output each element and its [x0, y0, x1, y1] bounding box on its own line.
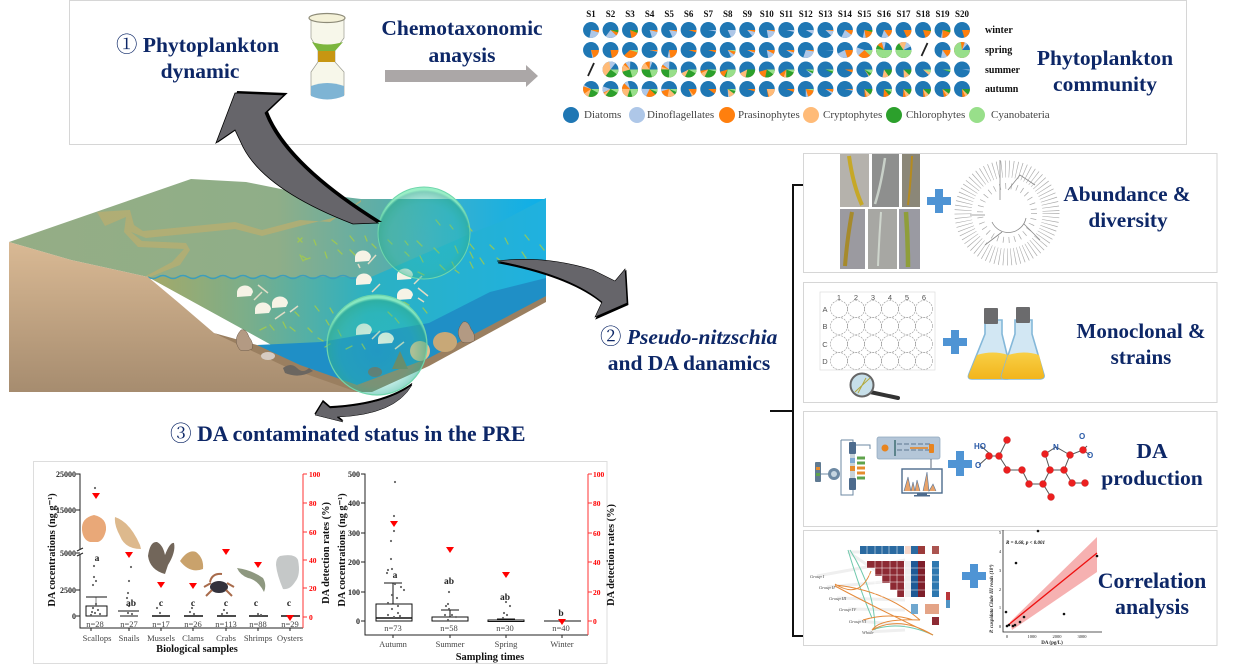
- icon: clam: [180, 551, 203, 570]
- category labels: Crabs: [216, 633, 236, 643]
- chart: pie grid: [583, 9, 1021, 97]
- left tick labels: 100: [348, 588, 360, 597]
- left tick labels: 500: [348, 470, 360, 479]
- category labels: n=26: [184, 619, 202, 629]
- scatter plot: 5: [999, 530, 1002, 535]
- zooplankton: [237, 250, 428, 349]
- letters: ab: [126, 599, 136, 609]
- left tick labels: 25000: [56, 470, 76, 479]
- chromatography diagram: [815, 437, 942, 496]
- molecule: domoic acid: N: [1053, 443, 1059, 452]
- station labels: S5: [664, 9, 674, 19]
- axis titles: Sampling times: [456, 652, 524, 663]
- left tick labels: 200: [348, 558, 360, 567]
- well plate: 4: [888, 293, 892, 302]
- molecule: domoic acid: O: [1079, 432, 1085, 441]
- icon: plus: [943, 330, 967, 354]
- category labels: Summer: [436, 639, 465, 649]
- well plate: 2: [854, 293, 858, 302]
- heading: chemotaxonomic analysis: Chemotaxonomic: [381, 16, 543, 40]
- letters: c: [254, 599, 258, 609]
- station labels: S7: [703, 9, 713, 19]
- chart: sampling times: [337, 470, 617, 663]
- icon: oyster: [276, 555, 299, 589]
- category labels: n=73: [384, 623, 402, 633]
- season labels: winter: [985, 25, 1013, 36]
- panel: DA contamination charts: [34, 462, 617, 664]
- panel: correlation analysis: [804, 530, 1217, 646]
- station labels: S15: [857, 9, 872, 19]
- scatter plot: 0: [999, 624, 1002, 629]
- icon: shrimp: [237, 568, 265, 592]
- well plate: 5: [905, 293, 909, 302]
- icon: snail: [115, 517, 141, 549]
- seabed: [214, 296, 546, 392]
- right tick labels: 40: [309, 556, 317, 565]
- axis titles: DA cocentrations (ng g⁻¹): [47, 493, 58, 607]
- left tick labels: 2500: [60, 586, 76, 595]
- category labels: Spring: [495, 639, 518, 649]
- station labels: S13: [818, 9, 833, 19]
- category labels: Oysters: [277, 633, 303, 643]
- category labels: Snails: [119, 633, 139, 643]
- category labels: n=17: [152, 619, 170, 629]
- icon: crab: [204, 574, 234, 596]
- right tick labels: 100: [593, 470, 604, 479]
- left tick labels: 300: [348, 529, 360, 538]
- left tick labels: [348, 470, 360, 626]
- station labels: S9: [742, 9, 752, 19]
- molecule: domoic acid: [974, 432, 1093, 500]
- back land and water surface: [9, 179, 546, 392]
- heading: monoclonal and strains: strains: [1111, 345, 1171, 369]
- left tick labels: 0: [72, 612, 76, 621]
- category labels: [379, 623, 574, 649]
- icon: mussels: [148, 542, 174, 574]
- well plate: [820, 292, 935, 370]
- scene: estuary cross-section: [9, 179, 546, 395]
- station labels: S2: [606, 9, 616, 19]
- molecule: domoic acid: O: [975, 461, 981, 470]
- heading: DA production: production: [1101, 466, 1203, 490]
- box plots: [86, 597, 300, 616]
- axis titles: DA detection rates (%): [606, 504, 617, 606]
- molecule: domoic acid: O: [1087, 451, 1093, 460]
- heading: chemotaxonomic analysis: [381, 16, 543, 67]
- heading: phytoplankton dynamic: ① Phytoplankton: [116, 28, 279, 59]
- legend: phytoplankton groups: Cryptophytes: [823, 109, 882, 121]
- pies: summer: [588, 62, 970, 77]
- heading: chemotaxonomic analysis: anaysis: [429, 43, 495, 67]
- station labels: S4: [645, 9, 655, 19]
- icon: scallop: [82, 515, 106, 542]
- left tick labels: 400: [348, 499, 360, 508]
- heading: DA production: DA: [1136, 439, 1168, 463]
- network and heatmap: Group IV: [839, 607, 857, 612]
- heading: DA production: [1101, 439, 1203, 490]
- scatter plot: 3000: [1078, 634, 1087, 639]
- category labels: n=88: [249, 619, 267, 629]
- heading: Pseudo-nitzschia and DA dynamics: and DA danamics: [608, 351, 770, 375]
- data points: [386, 481, 561, 622]
- category labels: n=29: [281, 619, 299, 629]
- axis titles: DA cocentrations (ng g⁻¹): [337, 493, 348, 607]
- well plate: B: [822, 322, 828, 331]
- left tick labels: 0: [356, 617, 360, 626]
- station labels: S17: [896, 9, 911, 19]
- season labels: summer: [985, 65, 1021, 76]
- station labels: [586, 9, 969, 19]
- scatter plot: P. cuspidata Clade III reads (10⁴): [989, 564, 995, 633]
- well plate: 3: [871, 293, 875, 302]
- scatter plot: 0: [1006, 634, 1009, 639]
- letters: c: [191, 599, 195, 609]
- heading: Pseudo-nitzschia and DA dynamics: ② Pseudo-nitzschia: [600, 320, 778, 351]
- right tick labels: 40: [593, 558, 601, 567]
- left tick labels: 15000: [56, 506, 76, 515]
- scatter plot: 4: [999, 549, 1002, 554]
- station labels: S1: [586, 9, 596, 19]
- station labels: S3: [625, 9, 635, 19]
- category labels: n=27: [120, 619, 138, 629]
- letters: a: [393, 571, 398, 581]
- letters: ab: [444, 577, 454, 587]
- letters: [393, 571, 564, 619]
- icon: plus: [948, 451, 972, 476]
- scatter plot: 2000: [1052, 634, 1062, 639]
- heading: correlation analysis: [1098, 569, 1206, 619]
- heading: monoclonal and strains: Monoclonal &: [1077, 319, 1205, 343]
- heading: correlation analysis: Correlation: [1098, 569, 1206, 593]
- axes: [76, 474, 303, 631]
- heading: abundance and diversity: Abundance &: [1063, 182, 1191, 206]
- station labels: S8: [723, 9, 733, 19]
- right tick labels: 0: [593, 617, 597, 626]
- arrow: to phytoplankton dynamic: [216, 92, 380, 224]
- season labels: autumn: [985, 84, 1019, 95]
- station labels: S11: [780, 9, 794, 19]
- arrow: to phytoplankton community: [385, 65, 538, 87]
- letters: ab: [500, 593, 510, 603]
- legend: phytoplankton groups: Prasinophytes: [738, 109, 800, 121]
- letters: c: [224, 599, 228, 609]
- well plate: C: [822, 340, 828, 349]
- legend: phytoplankton groups: Chlorophytes: [906, 109, 965, 121]
- heading: phytoplankton dynamic: [116, 28, 279, 83]
- bubble: upper magnifier: [378, 187, 470, 279]
- icon: plus: [962, 564, 986, 588]
- right tick labels: [309, 470, 320, 622]
- bracket: [770, 185, 805, 636]
- bubble: lower magnifier: [327, 295, 427, 395]
- category labels: n=30: [496, 623, 514, 633]
- category labels: n=58: [440, 623, 458, 633]
- right tick labels: 60: [309, 528, 317, 537]
- icon: plus: [927, 189, 951, 213]
- scatter plot: DA (pg/L): [1041, 641, 1063, 646]
- station labels: S18: [916, 9, 930, 19]
- heading: Pseudo-nitzschia and DA dynamics: [600, 320, 778, 375]
- chart: biological samples: [47, 470, 332, 655]
- axes: [361, 474, 588, 638]
- category labels: Mussels: [147, 633, 175, 643]
- slash: no data S18 spring: [922, 43, 928, 56]
- slash: no data S1 summer: [588, 63, 594, 76]
- network and heatmap: Group VI: [849, 619, 866, 624]
- network and heatmap: Group II: [819, 585, 835, 590]
- phytoplankton cells: [260, 220, 544, 349]
- arrow: to DA status: [315, 384, 412, 422]
- legend: phytoplankton groups: Diatoms: [584, 109, 621, 121]
- letters: [95, 554, 291, 609]
- right tick labels: 60: [593, 529, 601, 538]
- axis titles: DA detection rates (%): [321, 502, 332, 604]
- benthos shells and crabs: [236, 322, 475, 377]
- pies: spring: [583, 42, 970, 58]
- well plate: A: [822, 305, 828, 314]
- detection-rate markers: [390, 521, 566, 625]
- station labels: S6: [684, 9, 694, 19]
- season labels: spring: [985, 45, 1012, 56]
- station labels: S16: [877, 9, 891, 19]
- scatter plot: 3: [999, 568, 1002, 573]
- scatter plot: 2: [999, 587, 1001, 592]
- data points: [90, 487, 262, 616]
- letters: b: [558, 609, 564, 619]
- station labels: S19: [935, 9, 950, 19]
- category labels: n=40: [552, 623, 570, 633]
- heading: monoclonal and strains: [1077, 319, 1205, 369]
- legend: phytoplankton groups: [563, 107, 1050, 123]
- icon: flasks: [968, 307, 1044, 379]
- station labels: S12: [799, 9, 813, 19]
- pies: autumn: [583, 81, 970, 97]
- category labels: n=28: [86, 619, 104, 629]
- scatter plot: [989, 530, 1102, 646]
- heatmap: [860, 546, 950, 625]
- organism icons: [82, 515, 299, 596]
- right tick labels: 20: [309, 584, 317, 593]
- network lines: [817, 550, 933, 635]
- well plate: D: [822, 357, 828, 366]
- legend: phytoplankton groups: Dinoflagellates: [647, 109, 714, 121]
- category labels: Shrimps: [244, 633, 272, 643]
- left tick labels: 5000: [60, 549, 76, 558]
- well plate: 6: [922, 293, 926, 302]
- station labels: S10: [760, 9, 774, 19]
- well plate: 1: [837, 293, 841, 302]
- heading: DA contaminated status: ③ DA contaminated status in the PRE: [170, 417, 525, 448]
- heading: phytoplankton community: [1037, 46, 1173, 96]
- axis titles: [47, 493, 332, 655]
- molecule: domoic acid: HO: [974, 442, 986, 451]
- category labels: n=113: [215, 619, 237, 629]
- network and heatmap: Group III: [829, 596, 847, 601]
- legend: phytoplankton groups: Cyanobateria: [991, 109, 1050, 121]
- icon: magnifier: [850, 374, 898, 398]
- panel: phytoplankton dynamic: [70, 0, 1186, 144]
- axis titles: Biological samples: [156, 644, 238, 655]
- right tick labels: 80: [593, 499, 601, 508]
- heading: correlation analysis: analysis: [1115, 595, 1189, 619]
- phylogenetic tree: [963, 160, 1051, 257]
- station labels: S20: [955, 9, 969, 19]
- heading: phytoplankton community: community: [1053, 72, 1157, 96]
- heading: abundance and diversity: [1063, 182, 1191, 232]
- wave line: [148, 276, 368, 278]
- icon: filtration funnel: [309, 14, 345, 100]
- panel: abundance and diversity: [804, 154, 1217, 272]
- network and heatmap: Whole: [862, 630, 874, 635]
- left tick labels: [56, 470, 76, 621]
- category labels: [83, 619, 303, 643]
- letters: c: [287, 599, 291, 609]
- category labels: Scallops: [83, 633, 111, 643]
- heading: phytoplankton community: Phytoplankton: [1037, 46, 1173, 70]
- season labels: [985, 25, 1021, 95]
- water body: [148, 198, 546, 392]
- micrographs: [840, 154, 920, 269]
- letters: a: [95, 554, 100, 564]
- right tick labels: 80: [309, 499, 317, 508]
- scatter plot: 1000: [1028, 634, 1037, 639]
- scatter plot: 1: [999, 605, 1001, 610]
- foreground land: [9, 242, 357, 392]
- deep water: [257, 278, 546, 392]
- network and heatmap: Group I: [810, 574, 825, 579]
- letters: c: [159, 599, 163, 609]
- panel: monoclonal and strains: [804, 282, 1217, 402]
- category labels: Winter: [550, 639, 574, 649]
- station labels: S14: [838, 9, 852, 19]
- right tick labels: [593, 470, 604, 626]
- right tick labels: 0: [309, 613, 313, 622]
- right tick labels: 20: [593, 588, 601, 597]
- heading: abundance and diversity: diversity: [1088, 208, 1168, 232]
- detection-rate markers: [92, 493, 294, 621]
- category labels: Clams: [182, 633, 204, 643]
- network and heatmap: [810, 546, 950, 635]
- category labels: Autumn: [379, 639, 408, 649]
- scatter plot: R = 0.68, p < 0.001: [1006, 541, 1045, 546]
- right tick labels: 100: [309, 470, 320, 479]
- pies: winter: [583, 22, 970, 38]
- panel: DA production: [804, 412, 1217, 526]
- box plots: [376, 583, 581, 622]
- axis titles: [337, 493, 617, 663]
- river: [97, 200, 361, 277]
- arrow: to Pseudo-nitzschia: [497, 259, 628, 319]
- heading: phytoplankton dynamic: dynamic: [161, 59, 239, 83]
